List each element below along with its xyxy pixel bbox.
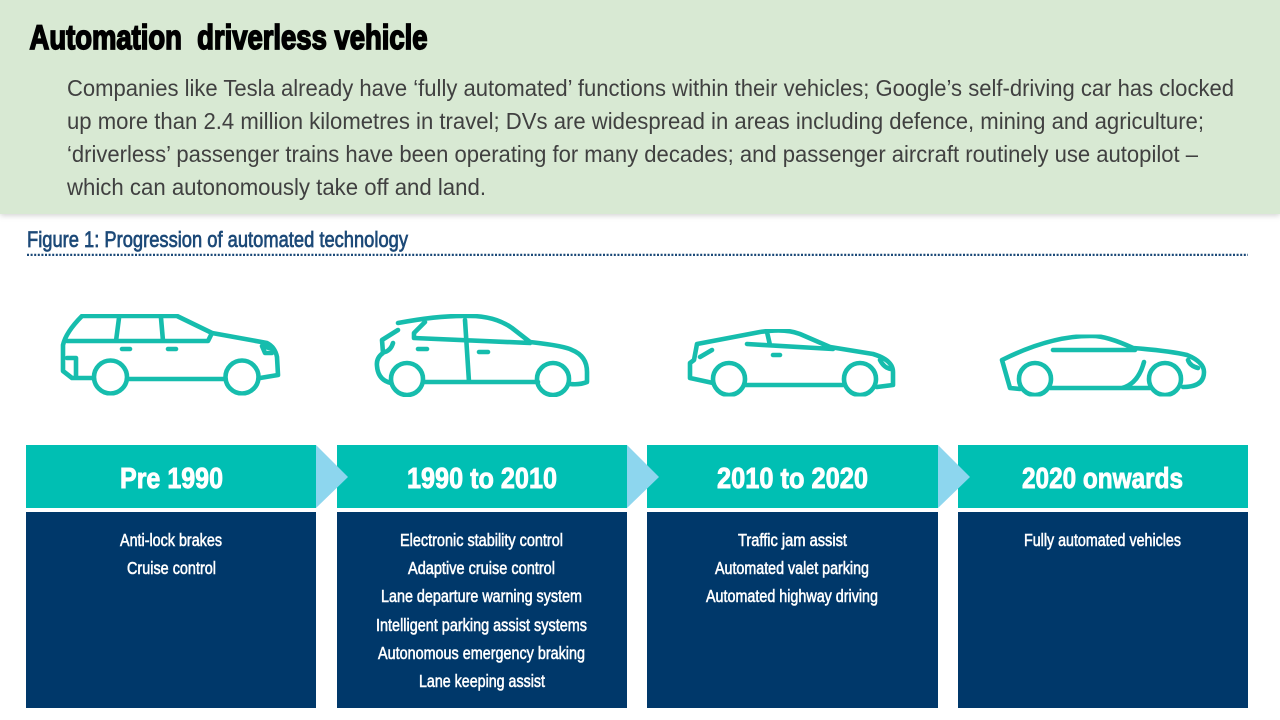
column: 2010 to 2020 (647, 445, 938, 708)
intro text block (66, 75, 1234, 200)
column: 2010 to 2020: Automated valet parking (715, 558, 869, 578)
column: 1990 to 2010: Adaptive cruise control (408, 558, 555, 578)
icon: hatchback car (377, 316, 587, 395)
column: 2020 onwards: 2020 onwards (1022, 463, 1183, 495)
column: 1990 to 2010: Electronic stability control (400, 530, 563, 550)
column: 1990 to 2010: 1990 to 2010 (407, 463, 557, 495)
arrow: to 2020 onwards (938, 445, 970, 508)
icon: estate car (63, 316, 278, 394)
intro text block: ‘driverless’ passenger trains have been operating for many decades; and passenger aircraft routinely use autopilot – (67, 141, 1198, 167)
column: 1990 to 2010: Lane keeping assist (419, 671, 545, 691)
arrow: to 2010 to 2020 (627, 445, 659, 508)
column: 1990 to 2010: Autonomous emergency braking (378, 643, 585, 663)
panel: intro header (0, 0, 1280, 214)
column: 1990 to 2010: Intelligent parking assist systems (376, 615, 587, 635)
intro text block: Companies like Tesla already have ‘fully automated’ functions within their vehicles; Google’s self-driving car has clocked (67, 75, 1234, 101)
title: Automation driverless vehicle (30, 19, 428, 57)
column: Pre 1990: Cruise control (127, 558, 216, 578)
icon: saloon car (690, 330, 893, 395)
icon: sports car (1002, 336, 1204, 395)
arrow: to 1990 to 2010 (316, 445, 348, 508)
column: Pre 1990: Pre 1990 (120, 463, 223, 495)
intro text block: up more than 2.4 million kilometres in travel; DVs are widespread in areas including defence, mining and agriculture; (67, 108, 1204, 134)
intro text block: which can autonomously take off and land. (66, 174, 486, 200)
column: 2020 onwards: Fully automated vehicles (1024, 530, 1181, 550)
column: 2020 onwards (958, 445, 1248, 708)
figure caption: Figure 1: Progression of automated technology (27, 227, 408, 252)
column: 1990 to 2010: Lane departure warning system (381, 586, 582, 606)
column: 2010 to 2020: Automated highway driving (706, 586, 878, 606)
column: Pre 1990 (26, 445, 316, 708)
column: 2010 to 2020: Traffic jam assist (738, 530, 847, 550)
column: Pre 1990: Anti-lock brakes (120, 530, 222, 550)
column: 1990 to 2010 (337, 445, 627, 708)
column: 2010 to 2020: 2010 to 2020 (717, 463, 868, 495)
